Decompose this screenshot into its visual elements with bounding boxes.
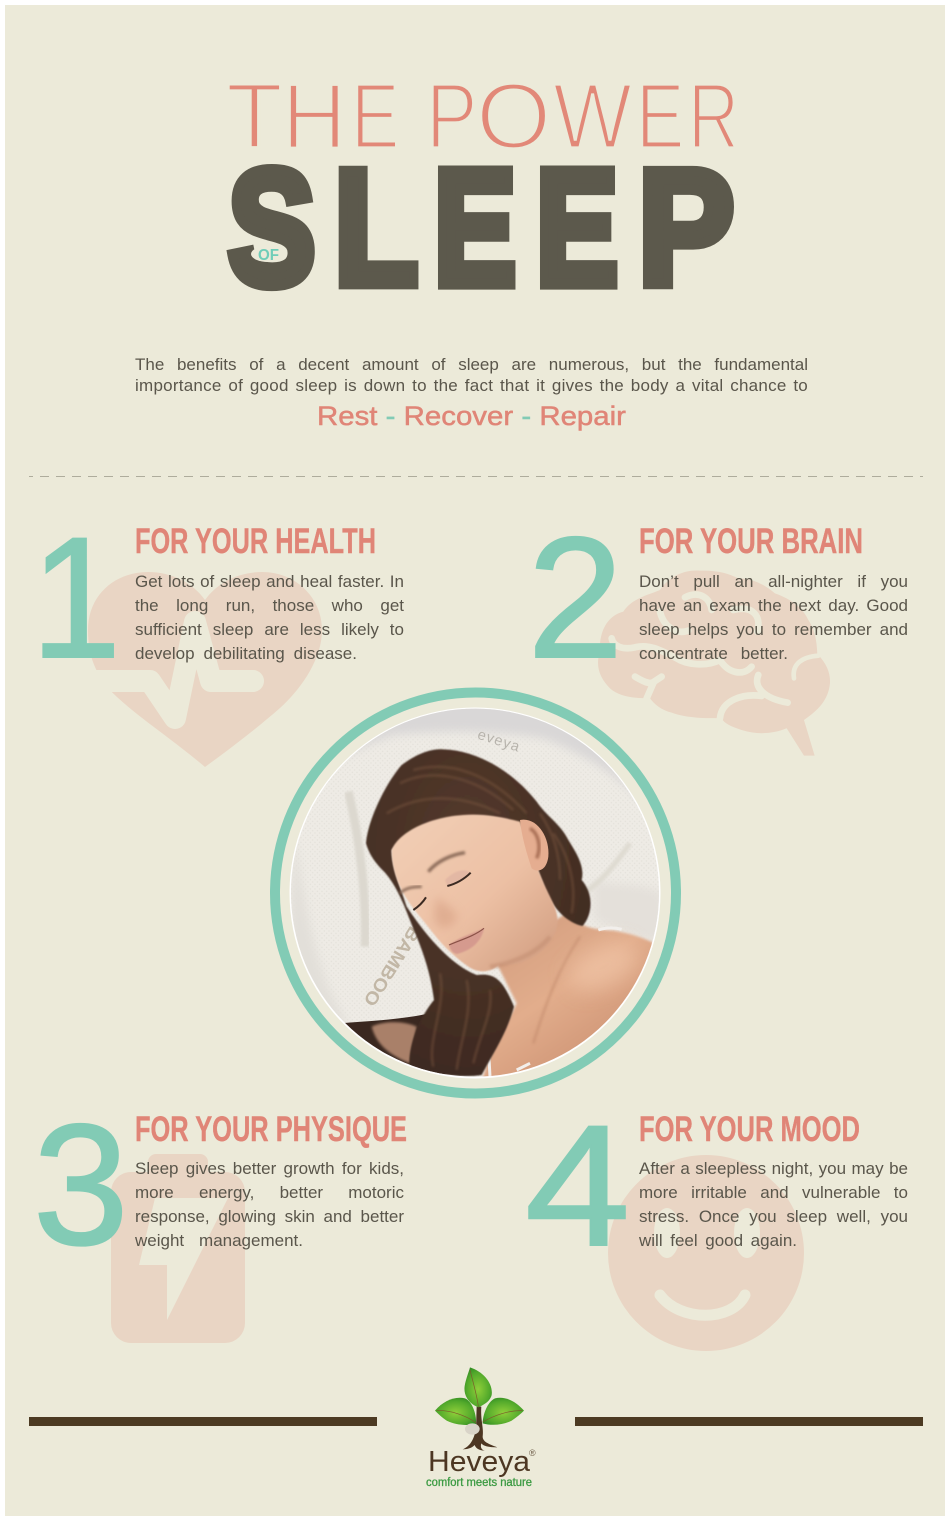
- icon: heart with pulse: [60, 572, 322, 767]
- registered mark: ®: [529, 1448, 536, 1458]
- title word: SLEEP: S: [228, 137, 316, 319]
- title word: SLEEP: [228, 135, 734, 320]
- title: [226, 64, 739, 320]
- straps: [489, 928, 622, 1077]
- text: health body: the long run, those who get: [135, 596, 404, 615]
- text: physique body: [135, 1159, 404, 1250]
- number 1: 1: [31, 502, 121, 694]
- text: physique body: more energy, better motoric: [135, 1183, 404, 1202]
- text: brain body: have an exam the next day. Good: [639, 596, 908, 615]
- text: mood body: stress. Once you sleep well, you: [639, 1207, 908, 1226]
- heading: for your physique: FOR YOUR PHYSIQUE: [135, 1110, 407, 1149]
- title word: SLEEP: P: [638, 135, 734, 319]
- title line: THE POWER: O: [476, 65, 551, 169]
- text: health body: develop debilitating disease.: [135, 644, 357, 663]
- title line: THE POWER: E: [636, 64, 684, 168]
- title line: THE POWER: H: [282, 64, 346, 168]
- pillow: [287, 700, 663, 1083]
- icon: tree with three leaves: [435, 1367, 524, 1451]
- intro paragraph: The benefits of a decent amount of sleep are numerous, but the fundamental: [135, 355, 808, 374]
- panel: for your brain: [528, 502, 908, 756]
- icon: brain: [598, 570, 830, 756]
- title line: THE POWER: R: [688, 64, 739, 168]
- title line: THE POWER: E: [351, 64, 399, 168]
- title word: SLEEP: E: [434, 136, 516, 319]
- logo tagline: comfort meets nature: [426, 1477, 532, 1489]
- icon: battery with bolt: [111, 1154, 245, 1343]
- intro paragraph: importance of good sleep is down to the fact that it gives the body a vital chance to: [135, 376, 808, 395]
- shoulder and neck: [482, 915, 652, 1076]
- text: mood body: will feel good again.: [639, 1231, 797, 1250]
- text: health body: Get lots of sleep and heal faster. In: [135, 572, 404, 591]
- number 3: 3: [33, 1089, 129, 1281]
- text: health body: sufficient sleep are less likely to: [135, 620, 404, 639]
- title word: SLEEP: L: [334, 137, 418, 320]
- heading: for your health: FOR YOUR HEALTH: [135, 522, 376, 561]
- panel: for your physique: [33, 1089, 407, 1343]
- text: mood body: After a sleepless night, you may be: [639, 1159, 908, 1178]
- title word: SLEEP: E: [536, 136, 618, 319]
- title line: THE POWER: P: [426, 65, 477, 169]
- hair: [366, 749, 591, 1076]
- logo wordmark: Heveya: [428, 1446, 531, 1478]
- text: brain body: sleep helps you to remember and: [639, 620, 908, 639]
- logo: Heveya: [426, 1367, 536, 1489]
- title word: OF: OF: [258, 247, 279, 264]
- intro paragraph: [135, 355, 808, 395]
- text: mood body: more irritable and vulnerable to: [639, 1183, 908, 1202]
- heading: for your mood: FOR YOUR MOOD: [639, 1110, 860, 1149]
- title word: OF: [251, 246, 285, 264]
- panel: for your health: [31, 502, 404, 767]
- title line: THE POWER: W: [553, 64, 632, 168]
- icon: smiley face: [608, 1155, 804, 1351]
- text: physique body: Sleep gives better growth for kids,: [135, 1159, 404, 1178]
- text: brain body: [639, 572, 908, 663]
- number 2: 2: [528, 502, 623, 694]
- white inner ring: [290, 708, 660, 1078]
- pillow: eveya: [475, 727, 522, 756]
- tagline: Rest Recover Repair: Rest - Recover - Repair: [317, 401, 626, 431]
- panel: for your mood: [525, 1090, 908, 1351]
- number 4: 4: [525, 1090, 630, 1282]
- lips: [449, 928, 484, 954]
- face: [392, 815, 558, 971]
- title line: THE POWER: [226, 64, 739, 169]
- ring: [275, 692, 676, 1094]
- text: physique body: weight management.: [135, 1231, 303, 1250]
- text: health body: [135, 572, 404, 663]
- text: brain body: concentrate better.: [639, 644, 788, 663]
- text: mood body: [639, 1159, 908, 1250]
- dark area below pillow: [345, 1014, 446, 1074]
- text: physique body: response, glowing skin and better: [135, 1207, 404, 1226]
- title line: THE POWER: T: [226, 64, 283, 168]
- text: brain body: Don’t pull an all-nighter if you: [639, 572, 908, 591]
- pillow: BAMBOO: [360, 923, 424, 1010]
- heading: for your brain: FOR YOUR BRAIN: [639, 522, 863, 561]
- photo: woman sleeping on pillow in ring: [270, 688, 681, 1098]
